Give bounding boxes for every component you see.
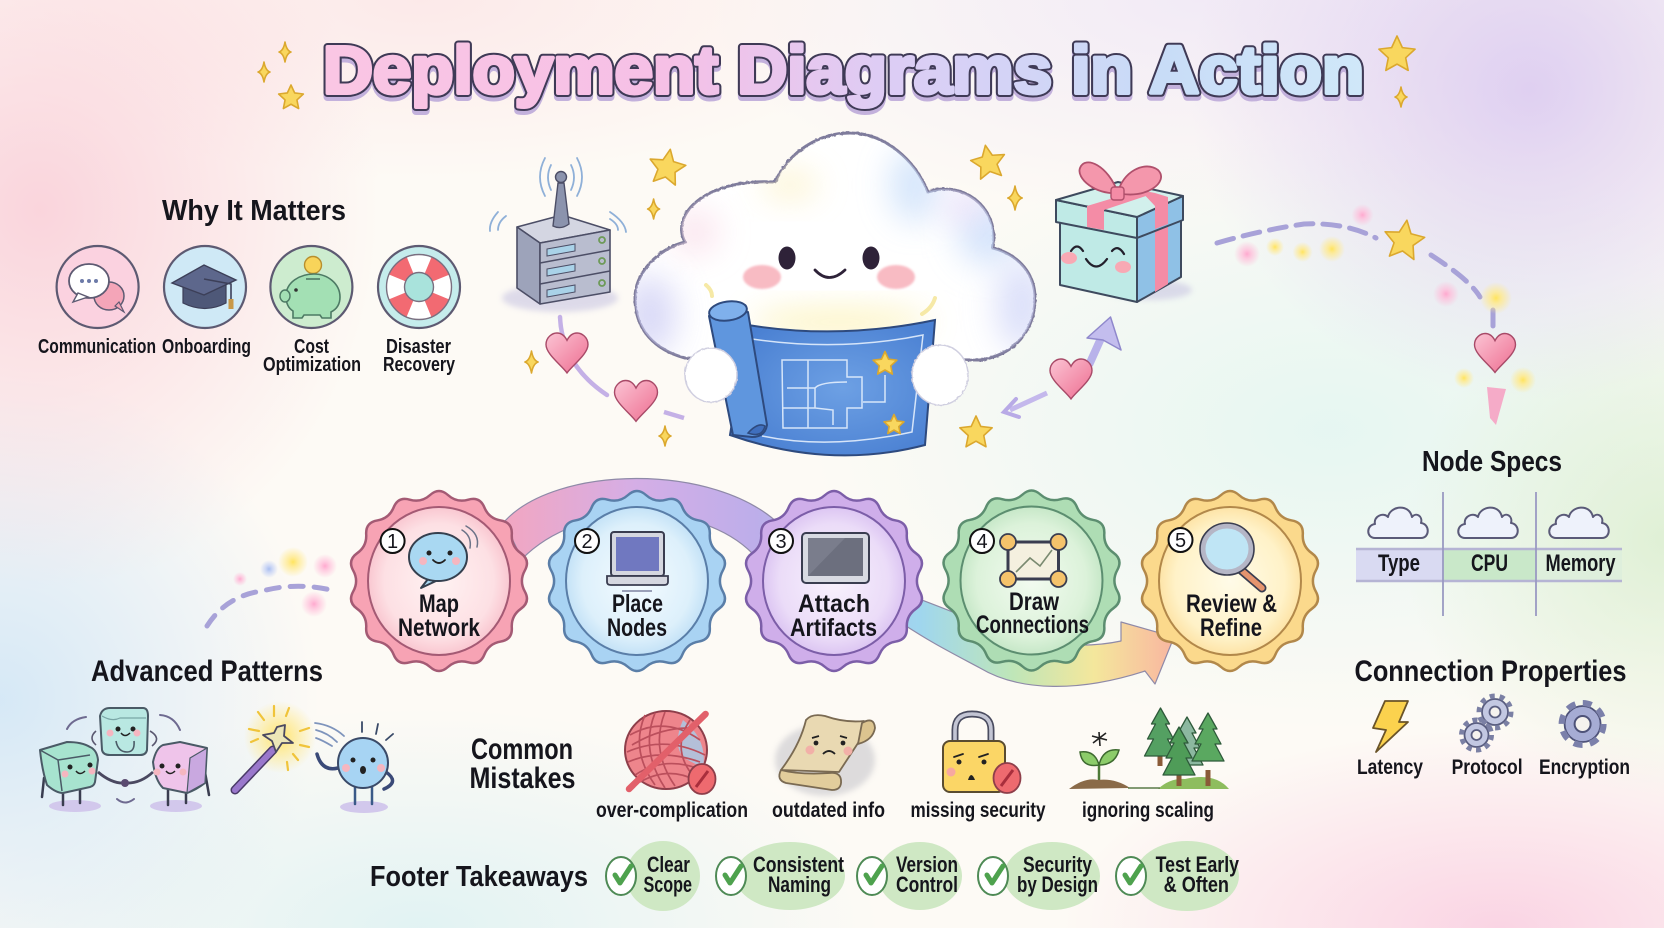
heading: common mistakes: Common: [471, 733, 573, 766]
panel: node specs table: [1356, 492, 1622, 616]
takeaway: test early and often: & Often: [1164, 872, 1229, 897]
step number 5: 5: [1175, 530, 1186, 552]
takeaway: security by design: by Design: [1017, 872, 1098, 897]
title lettering: Deployment Diagrams in Action: [323, 33, 1364, 108]
step label: Map: [419, 590, 459, 618]
step 2: place nodes: [549, 491, 725, 671]
takeaway: security by design: Security: [1023, 852, 1093, 877]
icon: sad padlock: [943, 714, 1020, 793]
cloud face: [743, 246, 915, 289]
cloud hands: [685, 345, 968, 405]
takeaway: consistent naming: Naming: [768, 872, 831, 897]
illustration: magic wand and blob: [235, 701, 393, 813]
takeaway: version control: Version: [896, 852, 958, 877]
connector: server to cloud with hearts: [525, 317, 684, 446]
labels: why it matters: Cost: [294, 336, 329, 358]
step number 3: [769, 529, 793, 553]
labels: why it matters: [38, 336, 456, 376]
takeaway: clear scope: [606, 841, 700, 911]
step number 1: [381, 529, 405, 553]
heading: footer takeaways: Footer Takeaways: [370, 861, 588, 893]
step number 2: [575, 529, 599, 553]
step 4: draw connections: [944, 490, 1119, 670]
connector: dashed trail left: [207, 547, 337, 626]
icons: three clouds: [1368, 508, 1609, 538]
step label: Artifacts: [790, 614, 877, 642]
stars around cloud: [647, 142, 1022, 447]
labels: common mistakes: ignoring scaling: [1082, 799, 1214, 822]
step label: Review &: [1186, 590, 1277, 618]
panel: why it matters icons: [38, 246, 460, 376]
cloud mascot holding blueprint: [624, 133, 1048, 455]
panel: connection properties: [1357, 696, 1630, 779]
step 5: review and refine: [1142, 491, 1318, 671]
heading: node specs: Node Specs: [1422, 446, 1562, 478]
icon: cost optimization: [270, 246, 352, 328]
column labels: CPU: [1471, 550, 1508, 577]
title sparkles and stars: [258, 36, 1415, 109]
step label: [607, 590, 667, 642]
labels: common mistakes: missing security: [910, 799, 1046, 822]
icon: tablet monitor: [802, 533, 869, 583]
column labels: Type: [1378, 550, 1420, 577]
panel: footer takeaways: [606, 841, 1240, 911]
heading: common mistakes: [470, 733, 576, 795]
icon: seedling to trees: [1069, 708, 1229, 789]
title outline: Deployment Diagrams in Action: [323, 33, 1364, 108]
labels: why it matters: Optimization: [263, 354, 361, 376]
takeaway: security by design: [978, 842, 1100, 910]
labels: common mistakes: [596, 799, 1214, 822]
labels: connection properties: Latency: [1357, 756, 1423, 779]
step label: Connections: [976, 611, 1089, 639]
rainbow process arrow: [504, 478, 1174, 686]
icon: chat bubble character: [409, 526, 478, 588]
takeaway: version control: Control: [896, 872, 958, 897]
icon: encryption gear: [1562, 703, 1604, 745]
takeaway: test early and often: Test Early: [1156, 852, 1240, 877]
column labels: [1378, 550, 1616, 577]
step number 5: [1168, 528, 1192, 552]
icon: tangled yarn ball: [625, 711, 716, 794]
step number 4: 4: [976, 531, 988, 553]
heading: why it matters: Why It Matters: [162, 195, 346, 227]
labels: connection properties: Encryption: [1539, 756, 1630, 779]
process steps: [351, 490, 1318, 671]
step 1: map network: [351, 491, 527, 671]
step label: [1186, 590, 1277, 642]
blueprint roll: [708, 299, 767, 437]
takeaway: test early and often: [1116, 841, 1240, 911]
step label: [398, 590, 480, 642]
takeaway: clear scope: Clear: [647, 852, 690, 877]
illustration: three cube characters: [40, 708, 209, 812]
blueprint sheet: [730, 320, 935, 455]
labels: why it matters: Communication: [38, 336, 156, 358]
labels: connection properties: [1357, 756, 1630, 779]
icon: outdated scroll: [775, 715, 875, 796]
icon: onboarding: [164, 246, 246, 328]
step label: Draw: [1009, 588, 1059, 616]
step label: [976, 588, 1089, 639]
step label: Place: [612, 590, 663, 618]
step label: Refine: [1200, 614, 1262, 642]
icon: gift box: [1056, 162, 1192, 302]
icon: communication: [57, 246, 139, 328]
step label: Attach: [798, 590, 870, 618]
step number 3: 3: [775, 531, 787, 553]
heading: common mistakes: Mistakes: [470, 762, 576, 795]
connector: cloud to gift double arrow with heart: [1004, 317, 1121, 417]
labels: common mistakes: over-complication: [596, 799, 748, 822]
takeaway: consistent naming: [716, 842, 845, 910]
step label: Nodes: [607, 614, 667, 642]
panel: advanced patterns illustrations: [40, 701, 393, 813]
takeaway: consistent naming: Consistent: [753, 852, 845, 877]
heading: advanced patterns: Advanced Patterns: [91, 655, 323, 688]
icon: magnifying glass: [1200, 523, 1262, 588]
title: [323, 33, 1364, 112]
step label: Network: [398, 614, 480, 642]
icon: laptop: [607, 532, 668, 591]
labels: common mistakes: outdated info: [772, 799, 885, 822]
column labels: Memory: [1546, 550, 1616, 577]
labels: why it matters: Onboarding: [162, 336, 251, 358]
takeaway: clear scope: Scope: [644, 872, 692, 897]
panel: common mistakes: [596, 708, 1229, 822]
connector: dashed trail right with star and heart: [1217, 204, 1536, 425]
takeaway: version control: [857, 842, 962, 910]
step number 2: 2: [581, 531, 593, 553]
labels: connection properties: Protocol: [1452, 756, 1523, 779]
cloud body: [624, 133, 1048, 360]
icon: disaster recovery: [378, 246, 460, 328]
step 3: attach artifacts: [746, 491, 922, 671]
step label: [790, 590, 877, 642]
labels: why it matters: Disaster: [386, 336, 451, 358]
labels: why it matters: Recovery: [383, 354, 456, 376]
step number 4: [970, 529, 994, 553]
title shadow: Deployment Diagrams in Action: [323, 37, 1364, 112]
table band: [1356, 492, 1622, 616]
icon: lightning bolt: [1373, 701, 1408, 752]
step number 1: 1: [387, 531, 398, 553]
icon: server with antenna: [490, 158, 626, 312]
icon: connected nodes: [1000, 534, 1066, 587]
icon: two gears: [1462, 696, 1511, 750]
